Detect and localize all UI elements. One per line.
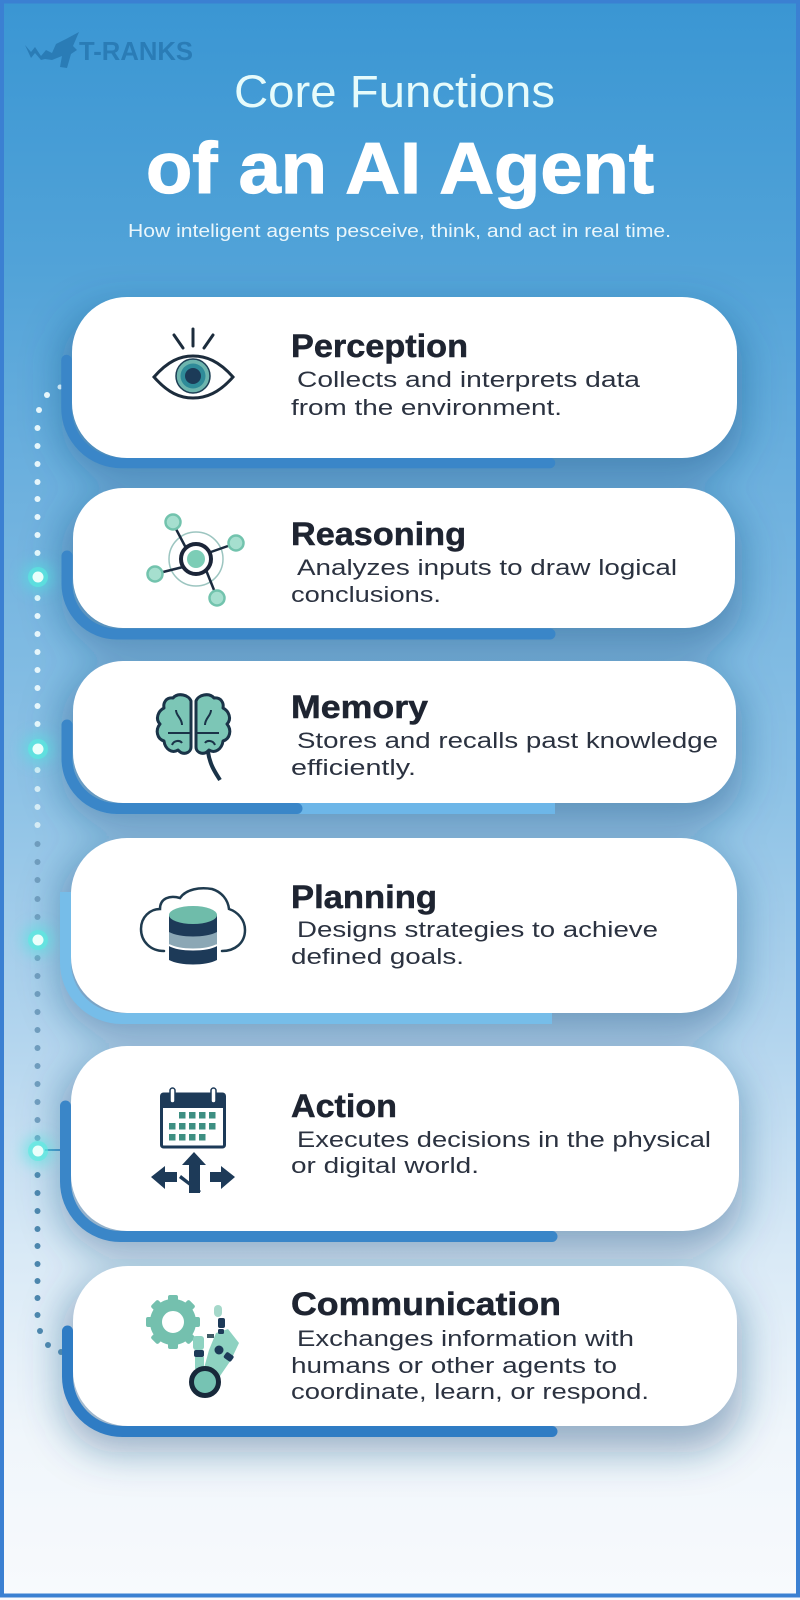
text: communication: humans or other agents to — [291, 1353, 617, 1378]
icon: network — [148, 514, 244, 606]
dotted timeline — [23, 384, 64, 1355]
text: planning — [291, 879, 658, 969]
panel: perception — [66, 297, 737, 463]
text: communication: coordinate, learn, or respond. — [291, 1379, 649, 1404]
text: reasoning: Analyzes inputs to draw logical — [297, 555, 677, 580]
text: perception — [291, 328, 641, 420]
text: reasoning — [291, 516, 677, 607]
text: planning: Designs strategies to achieve — [297, 917, 658, 942]
title: Core Functions — [234, 66, 555, 117]
text: perception: Collects and interprets data — [297, 367, 641, 392]
icon: calendar and arrows — [151, 1088, 235, 1193]
text: communication: Exchanges information with — [297, 1326, 634, 1351]
text: memory: efficiently. — [291, 755, 416, 780]
icon: eye — [154, 329, 233, 398]
icon: cloud database — [141, 888, 245, 964]
text: perception: from the environment. — [291, 395, 562, 420]
panel: communication — [67, 1266, 737, 1432]
text: reasoning: conclusions. — [291, 582, 441, 607]
text: action — [291, 1088, 711, 1178]
text: action: or digital world. — [291, 1153, 479, 1178]
title — [146, 66, 654, 209]
text: action: Action — [291, 1088, 397, 1124]
text: communication: Communication — [291, 1286, 561, 1322]
logo: T-RANKS — [25, 32, 193, 68]
text: communication — [291, 1286, 649, 1404]
title: of an AI Agent — [146, 129, 654, 209]
text: memory — [291, 689, 718, 780]
text: action: Executes decisions in the physical — [297, 1127, 711, 1152]
card shadows — [60, 310, 742, 1452]
text: planning: Planning — [291, 879, 437, 915]
icon: gear and robot hand — [146, 1295, 239, 1396]
text: memory: Stores and recalls past knowledge — [297, 728, 718, 753]
subtitle: How inteligent agents pesceive, think, and act in real time. — [128, 220, 671, 241]
panel: reasoning — [67, 488, 735, 634]
text: perception: Perception — [291, 328, 468, 364]
panel: memory — [67, 661, 736, 808]
panel: action — [65, 1046, 739, 1236]
panel: planning — [65, 838, 737, 1019]
text: memory: Memory — [291, 689, 428, 725]
logo: T-RANKS: T-RANKS — [79, 36, 193, 66]
icon: brain — [157, 695, 230, 780]
text: reasoning: Reasoning — [291, 516, 466, 552]
text: planning: defined goals. — [291, 944, 464, 969]
